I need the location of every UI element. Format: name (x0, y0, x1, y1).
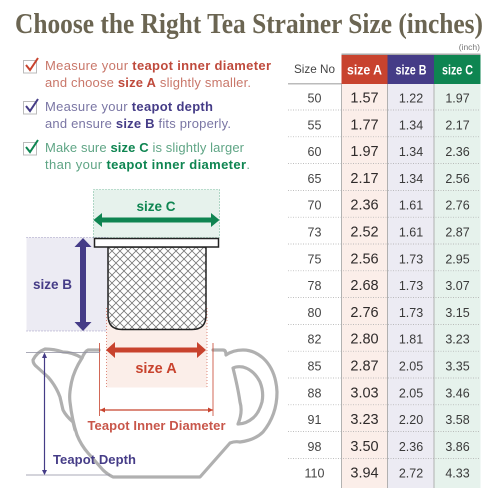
size B zone: size B (33, 277, 72, 292)
row 82: 82 (308, 333, 321, 347)
table header (288, 54, 480, 84)
unit note: (inch) (459, 42, 480, 52)
instruction 2 text: and ensure size B fits properly. (45, 116, 231, 131)
row 65: 1.34 (399, 172, 423, 186)
teapot inner diameter dimension (88, 343, 226, 433)
size C zone (94, 190, 220, 238)
row 80: 80 (308, 306, 321, 320)
row 82: 3.23 (445, 333, 470, 347)
instruction 3 text: than your teapot inner diameter. (45, 157, 250, 172)
icon: green checkbox (24, 140, 38, 155)
row 78: 2.68 (350, 278, 379, 294)
row 80: 1.73 (399, 306, 423, 320)
icon: purple checkbox (24, 99, 38, 114)
row 98: 2.36 (399, 440, 423, 454)
row 55: 2.17 (445, 118, 470, 132)
row 91 (308, 412, 470, 428)
row 70: 70 (308, 199, 321, 213)
size C zone: size C (136, 199, 176, 214)
instruction 3: size C (24, 140, 250, 172)
row 75: 75 (308, 252, 321, 266)
row 80 (308, 305, 470, 321)
instruction 3 text: Make sure size C is slightly larger (45, 140, 245, 155)
instruction 2: size B (24, 99, 231, 131)
row 65: 65 (308, 172, 321, 186)
row 65: 2.17 (350, 171, 379, 187)
row 55: 1.34 (399, 118, 423, 132)
row 50: 1.97 (445, 92, 470, 106)
row 70: 2.76 (445, 199, 470, 213)
row 88: 2.05 (399, 386, 423, 400)
row 110: 3.94 (350, 466, 379, 482)
size A zone (106, 308, 207, 388)
row 82 (308, 332, 470, 348)
row 78: 3.07 (445, 279, 470, 293)
diagram: strainer and teapot (26, 190, 277, 477)
row 78: 78 (308, 279, 321, 293)
size table (288, 42, 480, 488)
row 70 (308, 198, 470, 214)
row 60: 1.34 (399, 145, 423, 159)
row 91: 91 (308, 413, 321, 427)
row 50: 1.57 (350, 90, 379, 106)
row 82: 1.81 (399, 333, 423, 347)
table header: Size No (294, 62, 335, 76)
row 75 (308, 251, 470, 267)
row 50 (308, 90, 470, 106)
teapot outline (33, 349, 277, 477)
row 70: 2.36 (350, 198, 379, 214)
row 78 (308, 278, 470, 294)
teapot inner diameter dimension: Teapot Inner Diameter (88, 418, 226, 433)
row 50: 1.22 (399, 92, 423, 106)
row 60: 2.36 (445, 145, 470, 159)
row 55: 1.77 (350, 117, 379, 133)
instruction 1: size A (24, 58, 271, 90)
row 70: 1.61 (399, 199, 423, 213)
row 110: 2.72 (399, 467, 423, 481)
row 88 (308, 385, 470, 401)
row 73 (308, 224, 470, 240)
row 91: 2.20 (399, 413, 423, 427)
row 88: 88 (308, 386, 321, 400)
row 75: 2.56 (350, 251, 379, 267)
table header: size A (347, 62, 382, 78)
table header: size C (442, 62, 473, 78)
instruction 2 text: Measure your teapot depth (45, 99, 213, 114)
row 73: 73 (308, 226, 321, 240)
row 75: 2.95 (445, 252, 470, 266)
column backgrounds (342, 84, 480, 488)
row 91: 3.23 (350, 412, 379, 428)
row dividers (288, 110, 480, 458)
row 88: 3.46 (445, 386, 470, 400)
row 110 (305, 466, 470, 482)
row 85: 85 (308, 360, 321, 374)
row 65 (308, 171, 470, 187)
row 60: 1.97 (350, 144, 379, 160)
row 80: 2.76 (350, 305, 379, 321)
arrow: size C (94, 213, 220, 227)
teapot depth dimension (26, 352, 136, 475)
row 73: 2.52 (350, 224, 379, 240)
row 85: 2.87 (350, 358, 379, 374)
strainer basket (108, 247, 206, 330)
size B zone (26, 238, 122, 331)
row 85: 3.35 (445, 360, 470, 374)
row 85 (308, 358, 470, 374)
instruction 1 text: Measure your teapot inner diameter (45, 58, 271, 73)
row 110: 110 (305, 467, 325, 481)
label: size A: size A (135, 361, 177, 377)
instruction 3 text (45, 140, 250, 172)
row 85: 2.05 (399, 360, 423, 374)
row 78: 1.73 (399, 279, 423, 293)
row 73: 2.87 (445, 226, 470, 240)
row 82: 2.80 (350, 332, 379, 348)
arrow: size B (74, 238, 92, 331)
row 88: 3.03 (350, 385, 379, 401)
row 55: 55 (308, 118, 321, 132)
row 60: 60 (308, 145, 321, 159)
row 98: 98 (308, 440, 321, 454)
row 110: 4.33 (445, 467, 470, 481)
table header: size B (396, 62, 426, 78)
instruction 1 text: and choose size A slightly smaller. (45, 75, 251, 90)
instruction 1 text (45, 58, 271, 90)
row 98 (308, 439, 470, 455)
row 98: 3.86 (445, 440, 470, 454)
row 50: 50 (308, 92, 321, 106)
arrow: size A (106, 342, 206, 358)
row 91: 3.58 (445, 413, 470, 427)
row 55 (308, 117, 470, 133)
row 98: 3.50 (350, 439, 379, 455)
row 73: 1.61 (399, 226, 423, 240)
teapot depth dimension: Teapot Depth (53, 452, 136, 467)
row 65: 2.56 (445, 172, 470, 186)
row 75: 1.73 (399, 252, 423, 266)
row 80: 3.15 (445, 306, 470, 320)
instruction 2 text (45, 99, 231, 131)
row 60 (308, 144, 470, 160)
strainer rim (94, 238, 218, 247)
icon: red checkbox (24, 58, 38, 73)
